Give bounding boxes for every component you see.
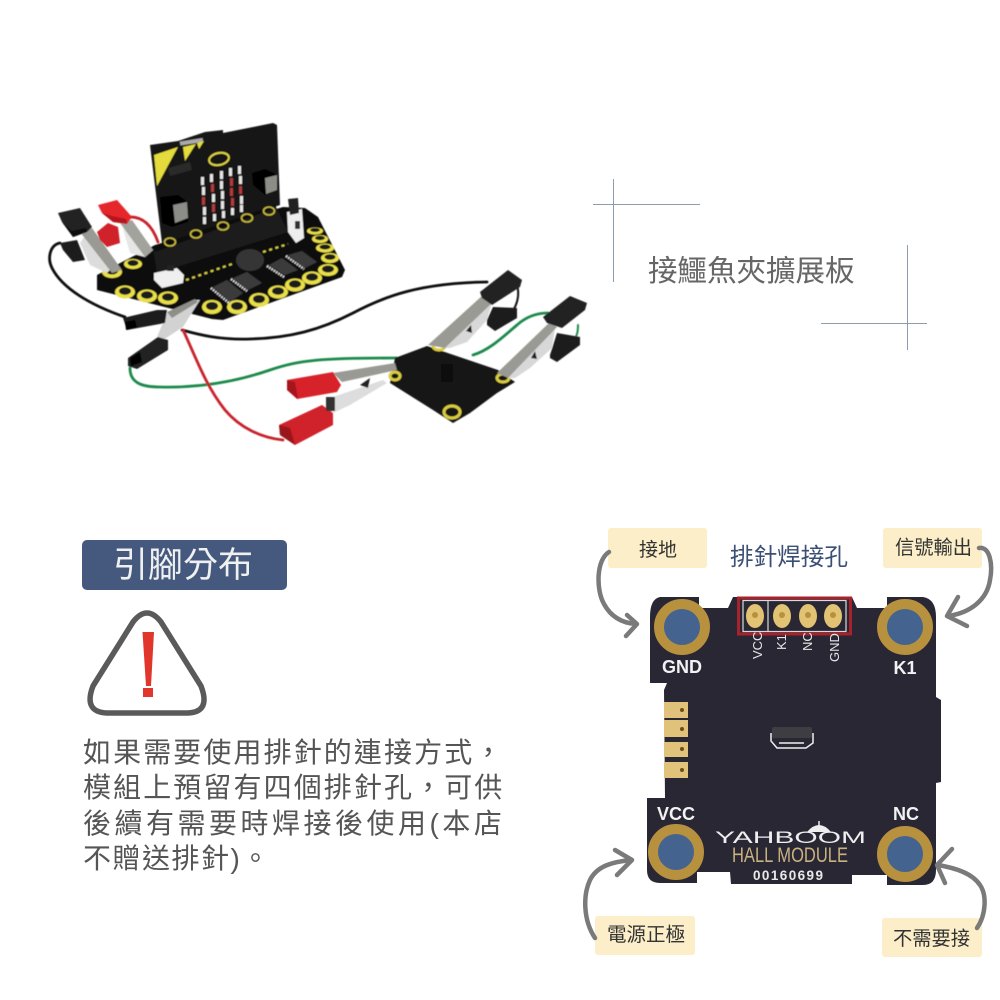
clip: black at module rear: [428, 270, 522, 348]
product illustration: micro:bit expansion board with alligator clips: [50, 123, 587, 445]
pin header caption: 排針焊接孔: [730, 544, 848, 571]
expansion board base: [97, 207, 345, 320]
hall sensor footprint: [771, 727, 813, 748]
corner labels: [657, 657, 919, 824]
micro:bit buttons: [160, 195, 188, 227]
LED matrix: [201, 166, 243, 224]
arrow: power positive: [585, 850, 632, 938]
chips: [213, 251, 317, 302]
description text: 模組上預留有四個排針孔，可供: [83, 772, 504, 803]
decorative crosshair bottom right: [821, 245, 927, 350]
description text: 不贈送排針)。: [83, 843, 271, 874]
pin header labels: K1: [774, 634, 789, 650]
micro:bit board: [150, 123, 280, 245]
callout: ground: 接地: [639, 539, 677, 561]
yellow pads: [102, 228, 339, 314]
serial number: 00160699: [753, 868, 823, 883]
decorative crosshair top left: [593, 179, 700, 282]
corner labels: NC: [893, 804, 919, 824]
clip: black on left: [58, 208, 122, 273]
brand logo: [715, 821, 866, 847]
callout: no connection: 不需要接: [893, 928, 970, 950]
callout: signal output: 信號輸出: [895, 537, 972, 559]
edge pins: [664, 702, 688, 778]
pin header labels: GND: [827, 633, 842, 662]
corner pad: GND: [659, 604, 705, 650]
arrow: no connection: [937, 849, 985, 928]
clip: red at module left: [279, 363, 397, 445]
product title: 接鱷魚夾擴展板: [648, 255, 855, 288]
arrow: signal output: [947, 548, 991, 626]
clip: red on left: [97, 200, 153, 257]
pin header labels: VCC: [750, 632, 765, 659]
clip: green wire at module right: [497, 296, 587, 378]
corner labels: GND: [662, 657, 702, 677]
clip: black at bottom of board: [123, 299, 200, 369]
brand logo: YAHBOOM: [715, 828, 866, 847]
heading badge: pin layout: [82, 540, 287, 590]
pin header labels: [750, 632, 842, 662]
module board: [647, 597, 941, 885]
corner labels: K1: [893, 658, 917, 678]
icon: warning triangle: [90, 613, 204, 713]
corner pad: NC: [882, 831, 928, 877]
module name: HALL MODULE: [732, 844, 848, 867]
callout: no connection: [882, 918, 982, 957]
callout: ground: [608, 528, 707, 568]
corner pad: K1: [882, 604, 928, 650]
yellow dash traces: [186, 244, 288, 280]
description text: [83, 737, 505, 874]
callout: power positive: [595, 916, 695, 955]
hall module diagram: [647, 597, 941, 885]
description text: 如果需要使用排針的連接方式，: [83, 737, 504, 768]
wires: [50, 217, 578, 440]
corner labels: VCC: [657, 804, 695, 824]
callout: signal output: [883, 528, 982, 568]
callout: power positive: 電源正極: [607, 924, 685, 946]
heading badge: pin layout: 引腳分布: [113, 546, 253, 585]
pin header labels: NC: [800, 632, 815, 651]
slide switches: [154, 268, 184, 288]
buzzer: [236, 249, 264, 271]
pin header highlight: [738, 598, 850, 634]
small hall module in perspective: [390, 346, 515, 423]
arrow: ground: [599, 552, 637, 636]
socket: [153, 205, 288, 273]
description text: 後續有需要時焊接後使用(本店: [83, 808, 505, 839]
corner pad: VCC: [653, 829, 699, 875]
